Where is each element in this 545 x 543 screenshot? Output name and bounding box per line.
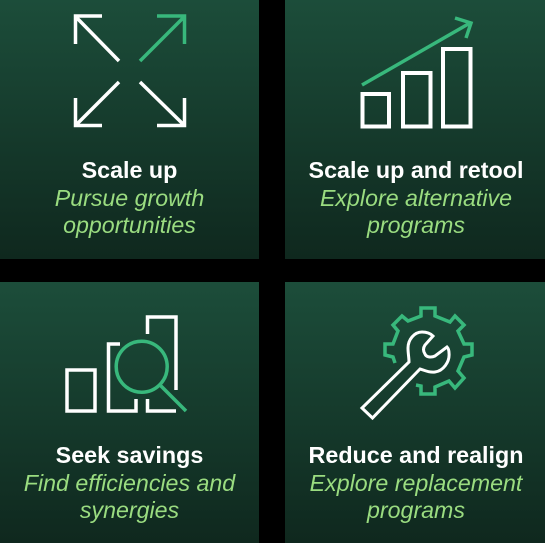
icon: bars with magnifier [65, 315, 188, 413]
heading: scale up and retool: Scale up and retool [309, 157, 523, 183]
text: pursue growth opportunities [55, 185, 204, 238]
text: pursue growth opportunities: opportunities [63, 212, 196, 238]
text: explore replacement programs [310, 470, 524, 523]
text: explore replacement programs: programs [367, 497, 465, 523]
text: find efficiencies and synergies: Find efficiencies and [24, 470, 235, 496]
heading: scale up: Scale up [82, 157, 177, 183]
icon: four outward arrows [74, 14, 186, 128]
text: pursue growth opportunities: Pursue growth [55, 185, 204, 211]
panel: scale up and retool [285, 0, 545, 259]
heading: seek savings: Seek savings [56, 442, 203, 468]
text: explore replacement programs: Explore replacement [310, 470, 522, 496]
text: explore alternative programs [320, 185, 512, 238]
icon: wrench and gear [360, 306, 474, 420]
panel: seek savings [0, 282, 259, 543]
text: find efficiencies and synergies: synergies [80, 497, 179, 523]
panel: scale up [0, 0, 259, 259]
text: explore alternative programs: programs [367, 212, 465, 238]
text: explore alternative programs: Explore alternative [320, 185, 512, 211]
panel: reduce and realign [285, 282, 545, 543]
text: find efficiencies and synergies [24, 470, 236, 523]
icon: rising bars with arrow [360, 16, 474, 128]
heading: reduce and realign: Reduce and realign [309, 442, 523, 468]
